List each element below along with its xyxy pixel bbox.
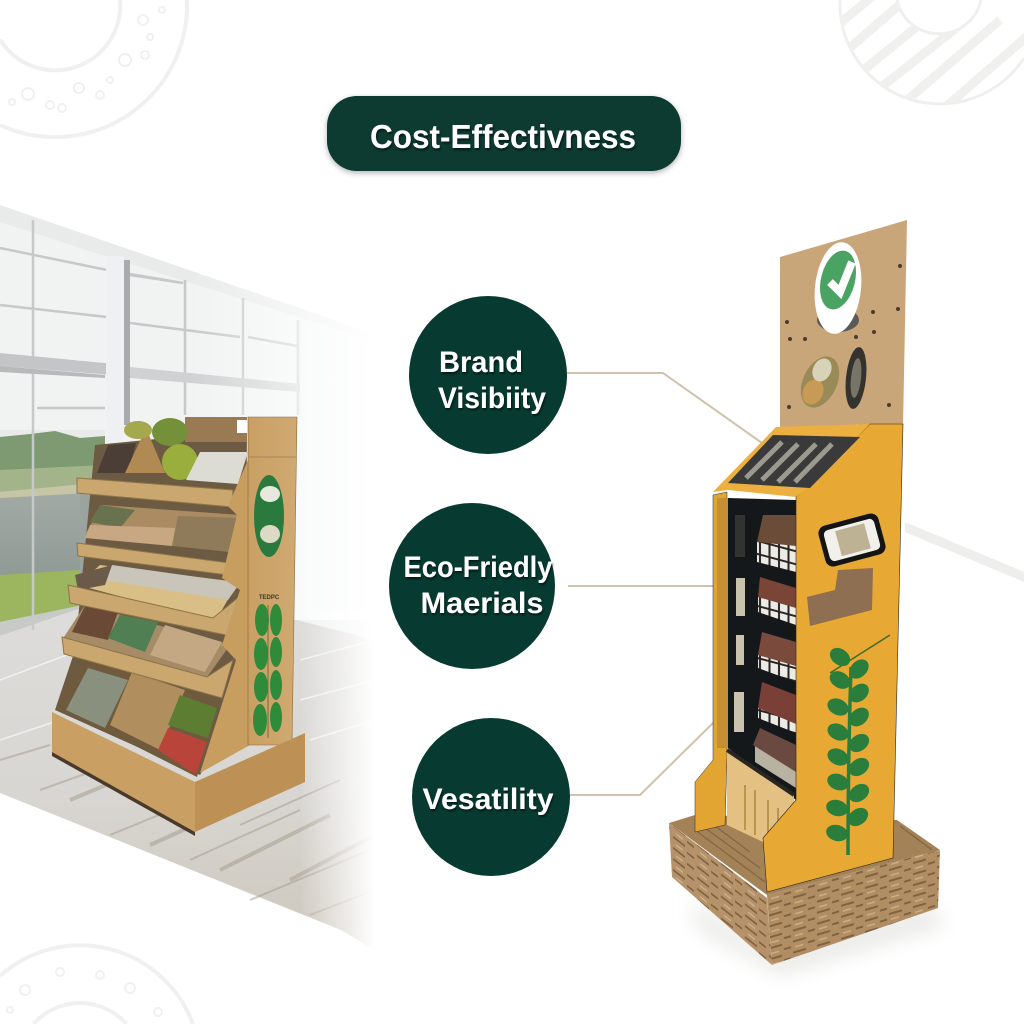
plant graphic: [824, 635, 890, 855]
circle: eco-friendly materials: Eco-Friedly: [404, 551, 553, 584]
interior black shelves: [728, 498, 796, 800]
pillar: [106, 256, 124, 446]
sill: [0, 606, 84, 636]
floor planks: [0, 745, 375, 915]
decorative corner: bottom left: [0, 945, 193, 1024]
side stepped panel: [200, 460, 250, 773]
base: [52, 712, 195, 832]
landscape: [0, 430, 105, 466]
leaf column: [253, 604, 282, 738]
top row products: [97, 417, 248, 484]
circle: versatility: Vesatility: [422, 783, 554, 816]
floor: [0, 609, 375, 950]
wall band: [0, 205, 372, 340]
horizontal beam: [0, 353, 125, 376]
top panel screen: [728, 435, 860, 488]
circle: brand visibility: Brand: [439, 346, 523, 379]
circle: eco-friendly materials: Maerials: [420, 587, 544, 620]
circle: versatility: [412, 718, 570, 876]
decorative streak right: [905, 522, 1024, 582]
product cluster: [807, 568, 873, 626]
top board: [780, 220, 907, 427]
bottom bin products: [58, 655, 217, 777]
circle: eco-friendly materials: [389, 503, 555, 669]
glass: [0, 212, 372, 640]
second row products: [85, 505, 240, 552]
third row products: [78, 565, 238, 622]
fourth row products: [62, 605, 230, 680]
window frames: [0, 220, 298, 630]
product rows: [753, 515, 796, 788]
decorative corner: top left: [0, 0, 187, 137]
yellow display stand: [669, 220, 945, 975]
fade to white: [190, 200, 390, 620]
slanted top: [713, 424, 870, 497]
small hanging items: [793, 346, 869, 414]
left side leg and edge: [695, 492, 727, 832]
shelf lips: [62, 478, 240, 698]
left column products: [734, 515, 745, 732]
cork base: [669, 815, 940, 965]
board peg holes: [785, 264, 902, 409]
wooden display stand: [52, 417, 305, 836]
oval badge: [254, 475, 284, 557]
tablet: [817, 512, 887, 568]
circle: brand visibility: [409, 296, 567, 454]
back panel: [55, 430, 247, 775]
decorative corner: top right: [838, 0, 1024, 106]
tall side panel: [248, 417, 297, 745]
title pill: Cost-Effectivness: [370, 118, 636, 155]
circle: brand visibility: Visibiity: [438, 382, 546, 415]
connector lines: [566, 373, 762, 795]
crate bottom: [727, 750, 794, 843]
yellow front panel: [763, 424, 903, 892]
small label: TEDPC: [259, 595, 280, 601]
check badge: [810, 240, 866, 336]
photo background: store window and floor: [0, 200, 390, 955]
title pill: [327, 96, 681, 171]
soft shadow: [690, 900, 945, 975]
